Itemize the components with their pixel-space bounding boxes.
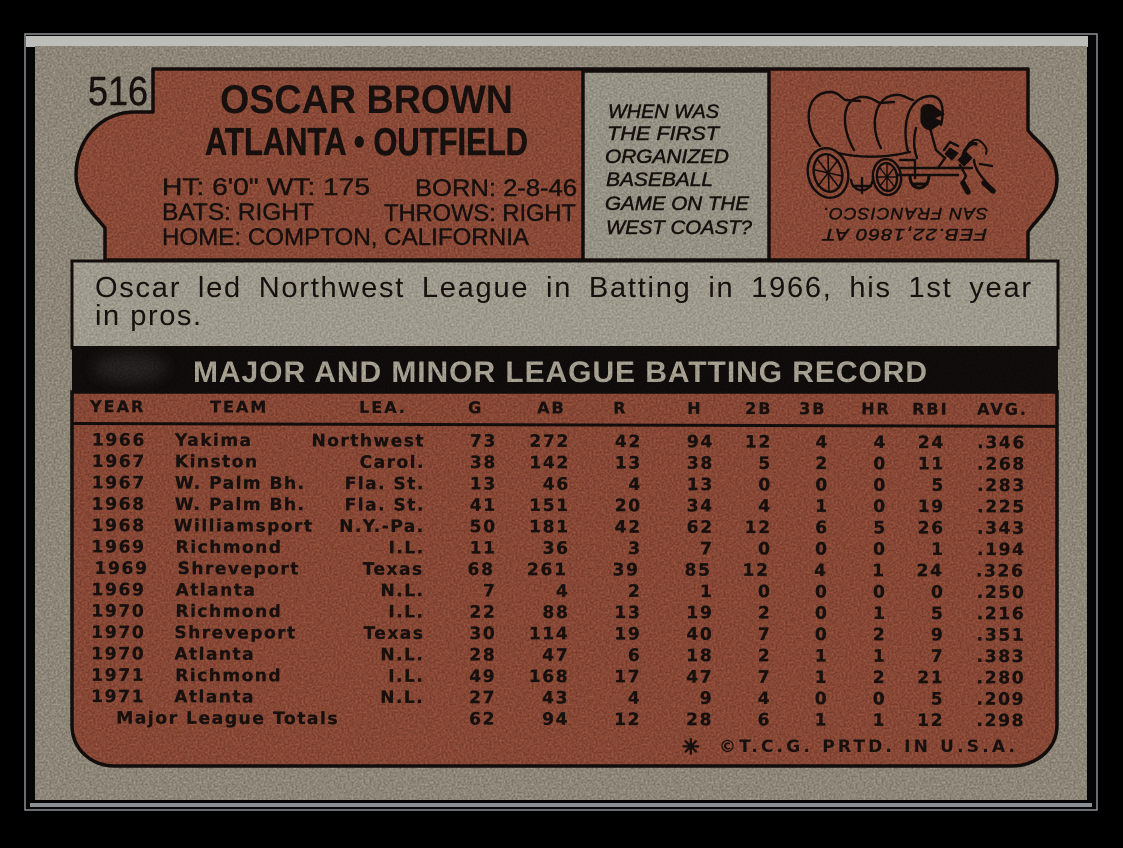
row 1969 Shreveport: 261 bbox=[527, 560, 568, 580]
row 1971 Richmond: 7 bbox=[758, 668, 771, 688]
row 1970 Shreveport: 114 bbox=[529, 624, 569, 644]
row 1969 Atlanta: 1 bbox=[700, 582, 714, 602]
trivia question panel: THE FIRST bbox=[607, 124, 721, 145]
row 1966 Yakima: 12 bbox=[745, 432, 772, 453]
row 1971 Richmond: 17 bbox=[614, 667, 641, 687]
section title band: MAJOR AND MINOR LEAGUE BATTING RECORD bbox=[193, 356, 927, 389]
brown header panel bbox=[76, 69, 1057, 260]
row 1966 Yakima: 94 bbox=[687, 432, 714, 452]
table header: AVG. bbox=[977, 400, 1028, 419]
row 1969 Shreveport bbox=[94, 559, 1025, 582]
biography box bbox=[72, 261, 1058, 348]
row 1967 Kinston: 142 bbox=[529, 453, 570, 473]
table header: AB bbox=[537, 398, 566, 417]
upside-down trivia answer bbox=[821, 204, 988, 244]
row major league totals: 28 bbox=[686, 710, 713, 730]
row 1967 Kinston: 11 bbox=[918, 454, 945, 474]
row 1966 Yakima: .346 bbox=[977, 433, 1026, 453]
row 1970 Richmond: 2 bbox=[758, 603, 772, 624]
row 1966 Yakima: Northwest bbox=[311, 431, 425, 451]
row 1969 Atlanta: 4 bbox=[556, 582, 570, 602]
stats panel bbox=[72, 392, 1057, 766]
biography box: Oscar led Northwest League in Batting in 1966, his 1st year bbox=[95, 272, 1031, 304]
row 1970 Atlanta: Atlanta bbox=[174, 645, 255, 665]
row 1970 Shreveport: Texas bbox=[363, 624, 424, 644]
row 1968 Williamsport: N.Y.-Pa. bbox=[339, 517, 425, 537]
row 1970 Shreveport bbox=[91, 623, 1025, 646]
row 1971 Atlanta: N.L. bbox=[380, 688, 424, 708]
row 1970 Atlanta: .383 bbox=[977, 647, 1025, 667]
row 1969 Richmond: 3 bbox=[628, 539, 642, 559]
player details bbox=[162, 174, 577, 251]
row 1969 Richmond: 36 bbox=[543, 539, 570, 559]
row 1966 Yakima: 73 bbox=[470, 432, 497, 452]
row 1968 Williamsport: 5 bbox=[873, 518, 887, 538]
row major league totals: .298 bbox=[976, 711, 1025, 731]
row 1969 Richmond: 0 bbox=[758, 539, 772, 559]
player details: BORN: 2-8-46 bbox=[415, 175, 577, 202]
row 1968 Williamsport: 6 bbox=[815, 518, 829, 538]
row 1968 W. Palm Bh.: 19 bbox=[918, 497, 945, 517]
row 1970 Shreveport: 30 bbox=[469, 624, 496, 644]
row 1970 Shreveport: .351 bbox=[977, 626, 1025, 646]
row 1967 Kinston bbox=[92, 452, 1026, 475]
trivia question panel: ORGANIZED bbox=[605, 147, 729, 168]
row 1969 Atlanta: 0 bbox=[873, 583, 887, 603]
row 1971 Richmond: I.L. bbox=[388, 667, 424, 687]
row major league totals: 1 bbox=[815, 711, 828, 731]
table header: LEA. bbox=[359, 398, 407, 417]
row 1971 Atlanta: Atlanta bbox=[174, 687, 255, 707]
row 1968 W. Palm Bh. bbox=[92, 495, 1026, 517]
row 1970 Shreveport: 9 bbox=[931, 625, 944, 645]
row 1970 Atlanta: 47 bbox=[542, 646, 569, 666]
row 1968 Williamsport: .343 bbox=[977, 519, 1026, 539]
row 1967 W. Palm Bh.: .283 bbox=[977, 476, 1026, 496]
row 1967 Kinston: 2 bbox=[815, 454, 829, 474]
upside-down trivia answer: FEB.22,1860 AT bbox=[821, 225, 987, 244]
row 1971 Atlanta: 1971 bbox=[91, 687, 145, 707]
row 1970 Atlanta: 1970 bbox=[91, 644, 145, 664]
row 1969 Atlanta: 0 bbox=[931, 583, 945, 603]
row 1967 W. Palm Bh.: 13 bbox=[470, 474, 497, 495]
table header: G bbox=[468, 398, 483, 417]
row 1968 Williamsport: 42 bbox=[615, 518, 642, 538]
table header: HR bbox=[861, 399, 891, 418]
row 1968 Williamsport: 62 bbox=[687, 518, 714, 538]
row 1969 Atlanta: 2 bbox=[628, 582, 642, 602]
row 1970 Richmond: 19 bbox=[686, 603, 714, 623]
copyright line: ✳ bbox=[682, 735, 700, 759]
row 1967 Kinston: 5 bbox=[758, 454, 772, 474]
row 1970 Shreveport: 0 bbox=[815, 625, 828, 645]
row 1971 Atlanta: 43 bbox=[542, 688, 569, 708]
copyright line: ©T.C.G. PRTD. IN U.S.A. bbox=[719, 737, 1015, 757]
row 1969 Shreveport: 24 bbox=[917, 561, 944, 581]
row 1970 Richmond: Richmond bbox=[175, 602, 282, 622]
row 1970 Richmond: 5 bbox=[931, 604, 945, 624]
row 1970 Atlanta: 1 bbox=[815, 646, 828, 666]
row 1967 W. Palm Bh.: 13 bbox=[687, 475, 714, 495]
row 1968 Williamsport bbox=[92, 516, 1026, 539]
row 1970 Shreveport: 19 bbox=[614, 624, 641, 645]
row 1968 W. Palm Bh.: W. Palm Bh. bbox=[175, 495, 306, 515]
row 1971 Richmond: 47 bbox=[686, 667, 713, 688]
row 1969 Shreveport: 1 bbox=[872, 561, 886, 581]
table header: 2B bbox=[745, 399, 772, 418]
row 1971 Atlanta: 9 bbox=[700, 689, 713, 709]
row 1969 Atlanta: N.L. bbox=[381, 581, 425, 601]
row 1967 W. Palm Bh.: 0 bbox=[815, 475, 829, 495]
row 1966 Yakima: 272 bbox=[529, 432, 570, 452]
section title band bbox=[72, 346, 1058, 393]
row 1969 Shreveport: 12 bbox=[743, 561, 770, 581]
row 1969 Richmond: 1969 bbox=[92, 537, 146, 558]
team and position: ATLANTA • OUTFIELD bbox=[205, 121, 528, 164]
row 1970 Atlanta: 18 bbox=[686, 646, 713, 666]
row 1968 Williamsport: 26 bbox=[918, 518, 945, 539]
row major league totals bbox=[116, 708, 1025, 731]
row 1969 Richmond: I.L. bbox=[389, 538, 425, 558]
row 1966 Yakima: 42 bbox=[615, 432, 642, 452]
row 1966 Yakima: Yakima bbox=[174, 431, 253, 451]
row 1969 Richmond bbox=[92, 537, 1026, 560]
row 1971 Atlanta: 0 bbox=[873, 689, 886, 709]
row 1970 Richmond: I.L. bbox=[388, 602, 425, 622]
row 1971 Richmond: 49 bbox=[469, 667, 496, 687]
row 1968 W. Palm Bh.: 151 bbox=[529, 496, 570, 516]
table header: H bbox=[687, 399, 703, 418]
row 1970 Richmond: 1970 bbox=[91, 602, 146, 622]
row 1968 W. Palm Bh.: 4 bbox=[758, 497, 772, 517]
table header: YEAR bbox=[89, 397, 145, 416]
row 1967 Kinston: Kinston bbox=[175, 452, 259, 472]
row 1971 Atlanta bbox=[91, 687, 1025, 710]
row 1970 Shreveport: 40 bbox=[686, 625, 713, 645]
row 1970 Shreveport: 7 bbox=[758, 625, 771, 645]
row 1967 W. Palm Bh.: Fla. St. bbox=[345, 474, 425, 494]
table header: RBI bbox=[912, 399, 949, 419]
row major league totals: 1 bbox=[873, 711, 886, 731]
row 1969 Atlanta: .250 bbox=[977, 583, 1026, 603]
row 1969 Shreveport: 85 bbox=[685, 561, 712, 581]
row 1971 Richmond: 168 bbox=[529, 667, 569, 687]
row 1969 Shreveport: 4 bbox=[814, 561, 828, 581]
row 1968 W. Palm Bh.: Fla. St. bbox=[345, 495, 425, 516]
row 1970 Richmond: 1 bbox=[873, 604, 887, 624]
trivia question panel: WEST COAST? bbox=[606, 218, 752, 239]
biography box: in pros. bbox=[95, 300, 201, 332]
row 1967 Kinston: 13 bbox=[615, 453, 642, 474]
row 1970 Richmond: 22 bbox=[469, 603, 497, 623]
row major league totals: 12 bbox=[917, 711, 944, 731]
row 1969 Richmond: 0 bbox=[815, 540, 829, 560]
row 1969 Atlanta: 1969 bbox=[91, 580, 146, 600]
row 1968 W. Palm Bh.: 1 bbox=[815, 497, 829, 517]
row major league totals: 94 bbox=[542, 710, 569, 730]
row 1970 Richmond bbox=[91, 602, 1026, 624]
row 1970 Shreveport: 1970 bbox=[91, 623, 145, 643]
trivia question panel: WHEN WAS bbox=[608, 102, 719, 123]
row 1969 Richmond: 7 bbox=[700, 539, 714, 559]
row 1970 Atlanta: N.L. bbox=[380, 645, 424, 665]
row 1969 Atlanta bbox=[91, 580, 1026, 603]
row 1969 Atlanta: Atlanta bbox=[176, 580, 256, 601]
row 1967 W. Palm Bh.: W. Palm Bh. bbox=[175, 474, 306, 494]
row 1969 Shreveport: 68 bbox=[468, 560, 495, 580]
row major league totals: 62 bbox=[469, 710, 496, 730]
row 1970 Atlanta: 7 bbox=[931, 647, 944, 667]
row 1971 Richmond bbox=[91, 666, 1025, 688]
row 1969 Richmond: 0 bbox=[873, 540, 887, 560]
row 1967 Kinston: 1967 bbox=[92, 452, 146, 472]
row 1971 Richmond: 1971 bbox=[91, 666, 145, 686]
row 1969 Shreveport: 39 bbox=[613, 560, 640, 580]
table header: 3B bbox=[799, 399, 826, 418]
player details: THROWS: RIGHT bbox=[384, 200, 576, 227]
row 1967 W. Palm Bh.: 46 bbox=[543, 475, 570, 495]
row 1969 Richmond: .194 bbox=[977, 540, 1026, 560]
row 1968 W. Palm Bh.: 34 bbox=[687, 496, 714, 516]
row 1966 Yakima: 24 bbox=[918, 433, 945, 453]
card number: 516 bbox=[88, 68, 148, 114]
row 1967 Kinston: 38 bbox=[687, 454, 714, 474]
row 1970 Richmond: 0 bbox=[815, 604, 829, 624]
row 1971 Richmond: 21 bbox=[917, 668, 944, 688]
row 1968 Williamsport: 50 bbox=[470, 517, 497, 537]
row 1970 Atlanta: 28 bbox=[469, 645, 496, 666]
player name: OSCAR BROWN bbox=[220, 78, 513, 122]
row 1968 W. Palm Bh.: .225 bbox=[977, 497, 1026, 517]
row 1971 Atlanta: 5 bbox=[931, 689, 944, 710]
row 1968 W. Palm Bh.: 41 bbox=[470, 496, 497, 516]
row 1970 Richmond: .216 bbox=[977, 604, 1026, 624]
row 1968 Williamsport: 181 bbox=[529, 517, 570, 537]
row 1969 Atlanta: 0 bbox=[815, 582, 829, 602]
row major league totals: 6 bbox=[758, 710, 771, 730]
row 1970 Richmond: 13 bbox=[614, 603, 642, 623]
row 1967 W. Palm Bh.: 4 bbox=[628, 475, 642, 495]
icon: covered wagon and horse bbox=[803, 92, 993, 202]
row 1968 Williamsport: 1968 bbox=[92, 516, 146, 536]
row 1968 Williamsport: 12 bbox=[745, 518, 772, 538]
row 1967 W. Palm Bh. bbox=[92, 473, 1026, 496]
row 1971 Richmond: .280 bbox=[977, 668, 1025, 688]
player details: HOME: COMPTON, CALIFORNIA bbox=[162, 224, 529, 251]
table header bbox=[73, 397, 1056, 426]
row 1971 Atlanta: 27 bbox=[469, 688, 496, 708]
row 1967 Kinston: 38 bbox=[470, 453, 497, 473]
row 1969 Shreveport: Shreveport bbox=[178, 559, 300, 579]
trivia question panel: BASEBALL bbox=[606, 170, 713, 191]
row 1968 W. Palm Bh.: 1968 bbox=[92, 495, 146, 515]
row 1966 Yakima: 4 bbox=[815, 433, 829, 453]
row 1970 Richmond: 88 bbox=[542, 603, 570, 623]
batting record table bbox=[72, 397, 1056, 731]
row 1971 Richmond: Richmond bbox=[175, 666, 282, 686]
row 1970 Atlanta: 1 bbox=[873, 647, 886, 667]
row 1966 Yakima: 4 bbox=[873, 433, 887, 453]
row 1969 Atlanta: 0 bbox=[758, 582, 772, 602]
row 1969 Richmond: 11 bbox=[470, 539, 497, 559]
row 1968 W. Palm Bh.: 20 bbox=[615, 496, 642, 516]
table header: TEAM bbox=[210, 397, 268, 417]
row 1967 W. Palm Bh.: 1967 bbox=[92, 473, 146, 493]
row 1970 Atlanta: 2 bbox=[758, 646, 771, 666]
row 1967 Kinston: Carol. bbox=[360, 453, 425, 473]
row 1971 Richmond: 2 bbox=[873, 668, 886, 688]
row 1967 W. Palm Bh.: 0 bbox=[873, 476, 887, 496]
trivia question panel: GAME ON THE bbox=[605, 194, 749, 215]
row 1969 Shreveport: .326 bbox=[976, 561, 1025, 582]
row 1967 Kinston: 0 bbox=[873, 454, 887, 474]
row 1969 Richmond: Richmond bbox=[176, 538, 282, 558]
row major league totals: Major League Totals bbox=[116, 708, 339, 729]
row 1967 W. Palm Bh.: 0 bbox=[758, 475, 772, 495]
row 1971 Atlanta: 0 bbox=[815, 689, 828, 709]
row 1968 Williamsport: Williamsport bbox=[174, 516, 314, 537]
row 1971 Atlanta: 4 bbox=[758, 689, 771, 709]
row 1970 Atlanta: 6 bbox=[628, 646, 641, 666]
row 1966 Yakima: 1966 bbox=[92, 431, 146, 451]
table header: R bbox=[613, 399, 627, 418]
player details: HT: 6'0" WT: 175 bbox=[162, 174, 370, 201]
row 1969 Shreveport: 1969 bbox=[94, 559, 149, 579]
row 1968 W. Palm Bh.: 0 bbox=[873, 497, 887, 517]
row 1971 Atlanta: .209 bbox=[976, 690, 1025, 710]
row 1970 Shreveport: Shreveport bbox=[174, 623, 297, 644]
upside-down trivia answer: SAN FRANCISCO. bbox=[822, 204, 988, 223]
row major league totals: 12 bbox=[614, 710, 641, 730]
row 1970 Shreveport: 2 bbox=[873, 625, 886, 645]
row 1969 Richmond: 1 bbox=[931, 540, 945, 560]
row 1966 Yakima bbox=[92, 431, 1026, 453]
row 1971 Atlanta: 4 bbox=[628, 689, 641, 709]
row 1970 Atlanta bbox=[91, 644, 1025, 667]
player details: BATS: RIGHT bbox=[162, 199, 314, 226]
row 1971 Richmond: 1 bbox=[815, 668, 828, 688]
row 1969 Atlanta: 7 bbox=[483, 581, 497, 601]
row 1967 Kinston: .268 bbox=[977, 455, 1026, 475]
trivia question panel bbox=[583, 71, 769, 260]
row 1967 W. Palm Bh.: 5 bbox=[931, 476, 945, 496]
row 1969 Shreveport: Texas bbox=[363, 560, 424, 580]
